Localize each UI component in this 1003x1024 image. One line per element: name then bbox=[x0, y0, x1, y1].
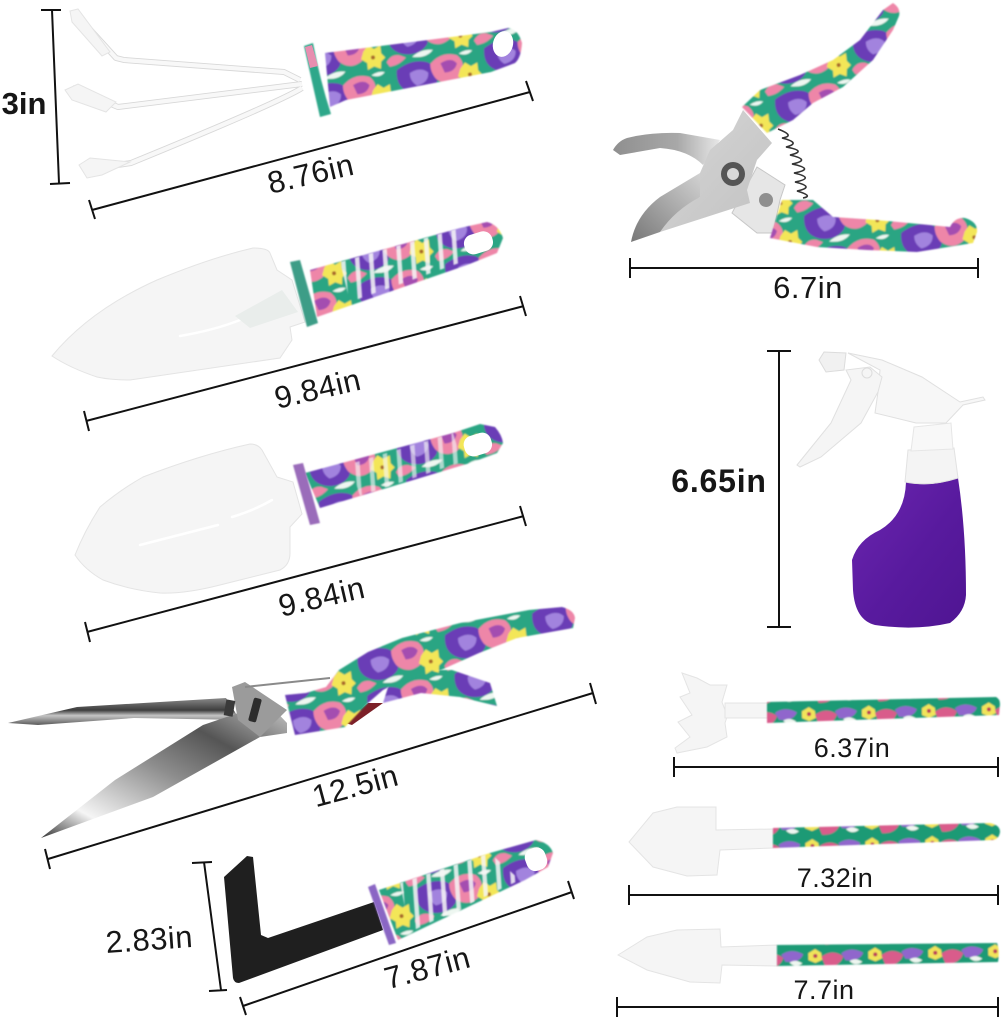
bottle body bbox=[852, 478, 966, 628]
pruner lower metal arm bbox=[732, 167, 785, 233]
dimension: 12.5in length: 12.5in bbox=[309, 758, 402, 814]
dimension: second 9.84in length bbox=[85, 506, 526, 642]
dimension: 3in height bbox=[2, 10, 70, 184]
mini rake head bbox=[675, 673, 727, 753]
dimension: first 9.84in length bbox=[84, 296, 526, 431]
dimension: 7.32in length: 7.32in bbox=[797, 863, 873, 893]
shears pivot plate bbox=[224, 678, 330, 737]
weeder blade bbox=[224, 856, 383, 983]
shears upper handle bbox=[285, 607, 575, 735]
mini rake handle bbox=[767, 697, 1000, 723]
dimension: 3in height: 3in bbox=[2, 86, 46, 121]
mini rake shaft bbox=[725, 703, 768, 718]
dimension: first 9.84in length: 9.84in bbox=[271, 362, 364, 416]
dimension: 2.83in height: 2.83in bbox=[104, 919, 194, 960]
tool: narrow trowel bbox=[52, 222, 503, 380]
dimension: 7.32in length bbox=[629, 863, 998, 905]
pruner upper handle bbox=[742, 3, 899, 133]
mini shovel blade bbox=[629, 807, 773, 876]
dimension: 7.87in length bbox=[240, 881, 574, 1015]
bottle collar bbox=[905, 448, 958, 484]
pruner main plate bbox=[660, 110, 772, 232]
dimension: 7.87in length: 7.87in bbox=[381, 940, 474, 996]
tool: spray bottle bbox=[797, 352, 985, 628]
dimension: 6.7in length bbox=[630, 258, 978, 305]
pruner pivot nut bbox=[721, 162, 745, 186]
dimension: 12.5in length bbox=[45, 683, 596, 869]
dimension: 6.37in length: 6.37in bbox=[814, 733, 890, 763]
tool: pruning shears bbox=[613, 3, 977, 252]
wide trowel blade bbox=[75, 444, 302, 593]
dimension: 8.76in length bbox=[89, 81, 533, 219]
dimension: 7.7in length: 7.7in bbox=[793, 975, 855, 1005]
shears trigger bbox=[345, 703, 383, 725]
dimension: 6.37in length bbox=[674, 733, 998, 777]
dimension: 8.76in length: 8.76in bbox=[264, 147, 357, 201]
narrow trowel handle bbox=[290, 222, 503, 327]
dimension: 2.83in height bbox=[104, 862, 227, 991]
tool: mini transplanter bbox=[618, 929, 999, 983]
tool: mini shovel bbox=[629, 807, 1000, 876]
dimension: 6.65in height: 6.65in bbox=[671, 463, 767, 499]
weeder handle bbox=[368, 840, 553, 945]
pruner hook blade bbox=[613, 133, 720, 165]
dimension: second 9.84in length: 9.84in bbox=[275, 570, 368, 624]
tool: mini rake bbox=[675, 673, 1000, 753]
narrow trowel blade bbox=[52, 248, 305, 380]
dimension: 6.7in length: 6.7in bbox=[773, 270, 843, 305]
pruner spring bbox=[778, 129, 807, 198]
bottle neck bbox=[911, 423, 953, 451]
shears upper blade bbox=[8, 698, 240, 725]
mini transplanter blade bbox=[618, 929, 777, 983]
cultivator handle bbox=[304, 28, 522, 117]
tool: hand cultivator bbox=[65, 9, 522, 178]
dimension: 7.7in length bbox=[617, 975, 998, 1017]
shears lower handle bbox=[383, 670, 497, 706]
pruner lower handle bbox=[770, 200, 977, 252]
cultivator tines bbox=[65, 9, 302, 178]
wide trowel handle bbox=[293, 424, 503, 525]
tool: weeder knife bbox=[224, 840, 553, 983]
tool: wide trowel bbox=[75, 424, 503, 593]
mini transplanter handle bbox=[777, 943, 999, 966]
spray trigger head bbox=[797, 352, 985, 467]
dimension: 6.65in height bbox=[671, 351, 791, 627]
shears lower blade bbox=[41, 703, 287, 838]
mini shovel handle bbox=[773, 823, 1000, 848]
tool: grass shears bbox=[8, 607, 575, 838]
pruner cutting blade bbox=[631, 173, 700, 242]
